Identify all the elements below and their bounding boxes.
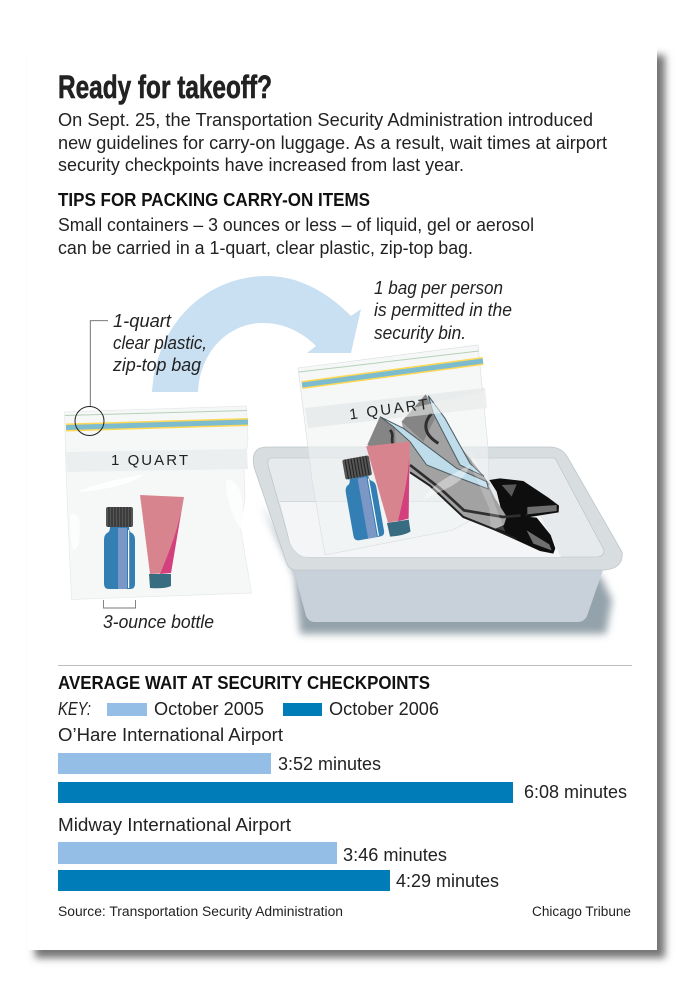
bag standing in bin (behind shoes) xyxy=(298,345,490,555)
bar chart: Midway International Airport xyxy=(58,814,499,891)
bar chart: Midway International Airport: Midway International Airport xyxy=(58,814,291,835)
label: 3-ounce bottle with bracket: 3-ounce bottle xyxy=(103,612,214,632)
legend: October 2006 xyxy=(329,698,439,719)
bag label text: 1 QUART xyxy=(348,396,429,423)
title: Ready for takeoff? xyxy=(58,69,272,105)
illustration: clear plastic bag with bottle and tube xyxy=(64,406,252,600)
heading: average wait: AVERAGE WAIT AT SECURITY CHECKPOINTS xyxy=(58,673,430,693)
illustration: security bin with bag and shoes xyxy=(253,345,622,634)
divider xyxy=(58,664,632,666)
heading: packing tips: TIPS FOR PACKING CARRY-ON ITEMS xyxy=(58,190,370,210)
back shoe xyxy=(402,394,490,492)
front shoe xyxy=(367,417,507,530)
icon: pink tube in bin xyxy=(366,440,424,538)
label: 1 bag per person xyxy=(374,278,512,343)
callout: circle and leader line to zip top xyxy=(75,321,108,436)
label: 1 bag per person: 1 bag per person xyxy=(374,278,503,298)
source credit: Source: Transportation Security Administration xyxy=(58,904,343,919)
label: 1-quart bag: clear plastic, xyxy=(113,333,207,353)
icon: pink tube xyxy=(140,495,184,588)
label: 1-quart bag: zip-top bag xyxy=(112,355,201,375)
bar chart: O'Hare International Airport: 6:08 minutes xyxy=(524,781,627,802)
label: 1-quart bag: 1-quart xyxy=(113,311,172,331)
publisher credit: Chicago Tribune xyxy=(532,904,631,919)
intro text block: security checkpoints have increased from last year. xyxy=(58,154,464,175)
intro text block xyxy=(58,109,607,175)
tips text block: Small containers – 3 ounces or less – of liquid, gel or aerosol xyxy=(58,214,534,235)
icon: pair of shoes xyxy=(367,394,559,554)
bow strap xyxy=(517,500,523,535)
intro text block: new guidelines for carry-on luggage. As a result, wait times at airport xyxy=(58,132,607,153)
legend: October 2005 xyxy=(154,698,264,719)
icon: blue bottle xyxy=(104,507,135,589)
bin interior xyxy=(268,458,604,557)
bar chart: O'Hare International Airport xyxy=(58,724,627,803)
legend: KEY: xyxy=(58,699,91,719)
intro text block: On Sept. 25, the Transportation Security Administration introduced xyxy=(58,109,593,130)
label: 1-quart bag xyxy=(112,311,207,375)
bin rim xyxy=(253,447,622,570)
label: 1 bag per person: is permitted in the xyxy=(374,300,512,320)
label: 3-ounce bottle with bracket xyxy=(103,600,214,632)
bag label text: 1 QUART xyxy=(111,452,188,469)
arrow: curved from bag to bin xyxy=(152,276,361,392)
bar chart: Midway International Airport: 3:46 minutes xyxy=(343,844,447,865)
label: 1 bag per person: security bin. xyxy=(374,323,466,343)
bin floor xyxy=(280,502,561,557)
bin front wall xyxy=(293,567,604,622)
bin shadow xyxy=(262,505,612,634)
bar chart: O'Hare International Airport: O’Hare International Airport xyxy=(58,724,283,745)
black toes and bows xyxy=(489,478,559,554)
icon: blue bottle in bin xyxy=(340,455,385,541)
bag highlights over shoes xyxy=(470,448,505,532)
bar chart: Midway International Airport: 4:29 minutes xyxy=(396,870,499,891)
bar chart: O'Hare International Airport: 3:52 minutes xyxy=(278,753,381,774)
tips text block: can be carried in a 1-quart, clear plastic, zip-top bag. xyxy=(58,237,473,258)
tips text block xyxy=(58,214,534,258)
bag band veil over shoe heel xyxy=(395,391,486,418)
legend xyxy=(58,698,439,719)
